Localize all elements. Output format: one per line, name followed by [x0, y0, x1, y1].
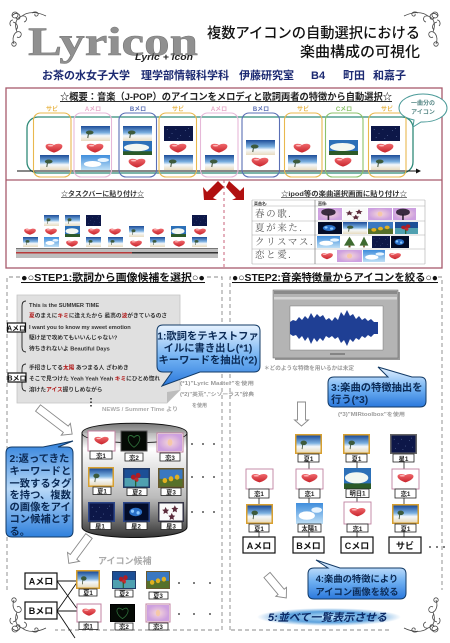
author line [42, 68, 406, 82]
melody to candidates matrix: Aメロ [29, 576, 53, 586]
section timeline: サビ [172, 105, 184, 113]
column: A melody: 夏1 [254, 525, 264, 533]
panel: step 2 [230, 271, 445, 630]
lyric source: NEWS / Summer Time より [102, 406, 178, 413]
candidate row: summer: 夏3 [166, 488, 176, 496]
callout 4: narrow icons [308, 560, 406, 599]
column: B melody: 恋1 [305, 489, 315, 498]
section timeline: サビ [297, 105, 309, 113]
title [207, 25, 421, 61]
candidate row: stars: 星2 [131, 522, 141, 530]
author line: B4 [311, 70, 326, 82]
section timeline: Aメロ [85, 106, 101, 113]
callout 3: feature extraction: 3:楽曲の特徴抽出を [331, 381, 423, 394]
lyrics sheet: 溶けたアイス握りしめながら [29, 386, 102, 394]
lyrics sheet: そこで見つけた Yeah Yeah Yeah キミにひとめ惚れ [29, 374, 160, 382]
arrow: red left [203, 181, 224, 200]
decorative corner ornament top right [404, 12, 440, 46]
column: sabi: 夏1 [401, 525, 411, 533]
column: sabi: 恋1 [401, 489, 411, 498]
melody to candidates matrix [25, 570, 211, 638]
callout 1: extract keywords: キーワードを抽出(*2) [159, 354, 257, 366]
MIRtoolbox note: (*3)"MIRtoolbox"を使用 [338, 411, 405, 418]
author line: 理学部情報科学科 [141, 68, 229, 82]
row A candidates: 夏2 [119, 590, 129, 598]
column: C melody: 夏1 [352, 455, 362, 463]
tool notes [180, 380, 254, 409]
melody to candidates matrix: Bメロ [29, 606, 53, 616]
step 5 banner: 5:並べて一覧表示させる [268, 611, 387, 624]
callout 2: candidate images: 一致するタグ [10, 477, 72, 490]
ipod song table [252, 200, 425, 264]
callout 2: candidate images [6, 441, 73, 538]
section timeline: サビ [381, 105, 393, 113]
decorative corner ornament bottom left [10, 598, 46, 632]
row B candidates: 恋2 [119, 622, 129, 631]
column: C melody [341, 434, 373, 553]
ipod song table: 夏が来た. [255, 222, 303, 234]
row A candidates: 夏3 [153, 592, 163, 600]
author line: 和嘉子 [373, 68, 406, 82]
callout 4: narrow icons: 4:楽曲の特徴により [316, 573, 398, 584]
arrow: lyrics to database [33, 402, 77, 440]
waveform window [273, 290, 400, 360]
arrow: database to candidates [63, 532, 95, 568]
ipod song table: 恋と愛. [255, 249, 292, 261]
row B candidates [77, 604, 170, 631]
undecided feature note: ＊どのような特徴を用いるかは未定 [264, 364, 354, 372]
column: B melody: 夏1 [304, 455, 314, 463]
candidate row: summer: 夏1 [97, 488, 107, 496]
section timeline: サビ [46, 105, 58, 113]
column: C melody: 明日1 [349, 490, 366, 498]
lyrics sheet: This is the SUMMER TIME [29, 303, 99, 309]
candidate row: love: 恋2 [129, 453, 139, 462]
section timeline: Bメロ [253, 106, 269, 113]
selected icons by section [243, 434, 445, 553]
lyrics sheet: I want you to know my sweet emotion [29, 325, 131, 331]
callout 2: candidate images: の画像をアイ [10, 500, 71, 514]
row B candidates: 恋3 [153, 622, 163, 631]
candidate row: stars: 星3 [166, 522, 176, 530]
candidate row: stars [88, 502, 184, 530]
candidate row: summer: 夏2 [132, 488, 142, 496]
callout 1: extract keywords: イルに書き出し(*1) [164, 342, 252, 354]
label: B melody: Bメロ [7, 374, 27, 382]
arrow: to final list [262, 571, 292, 602]
step 5 banner [257, 608, 401, 626]
section timeline: Bメロ [130, 106, 146, 113]
panel: overview [6, 88, 447, 268]
tool notes: を使用 [192, 402, 207, 409]
author line: 伊藤研究室 [239, 68, 294, 82]
logo: Lyricon: Lyricon [28, 19, 198, 64]
callout 2: candidate images: 2:返ってきた [10, 452, 69, 465]
ipod song table: 春の歌. [255, 208, 292, 220]
taskbar icons [16, 215, 218, 258]
row A candidates [76, 570, 170, 600]
ipod song table: 画像: [318, 200, 327, 206]
row B candidates: 恋1 [83, 622, 93, 630]
lyrics sheet: 手招きしてる太陽 あつまる人 ざわめき [29, 364, 129, 372]
column: sabi: 星1 [399, 455, 409, 463]
column: sabi [389, 434, 421, 553]
panel: step 1 [6, 271, 222, 638]
section timeline: Cメロ [336, 106, 352, 113]
arrow: red right [226, 181, 244, 200]
column: A melody: 恋1 [254, 489, 264, 498]
speech bubble: one song's icons [399, 94, 447, 127]
row A candidates: 夏1 [83, 589, 93, 597]
lyrics sheet: 待ちきれないよ Beautiful Days [29, 344, 110, 352]
callout 3: feature extraction: 行う(*3) [331, 393, 368, 406]
overview heading: ☆概要：音楽（J-POP）のアイコンをメロディと歌詞両者の特徴から自動選択☆ [60, 91, 392, 103]
logo: Lyricon: Lyric + icon [135, 52, 194, 62]
callout 2: candidate images: コン候補とす [10, 512, 71, 526]
lyrics sheet [17, 295, 180, 408]
speech bubble: one song's icons: 一曲分の [411, 99, 435, 107]
candidate row: stars: 星1 [95, 522, 105, 530]
candidate row: love: 恋3 [165, 453, 175, 462]
column: C melody: 恋1 [353, 524, 363, 533]
column: A melody: Aメロ [247, 541, 271, 551]
callout 2: candidate images: を持つ、複数 [10, 488, 72, 502]
ipod song table: クリスマス. [255, 237, 314, 248]
step 2 heading: ●○STEP2:音楽特徴量からアイコンを絞る○● [232, 271, 438, 284]
column: sabi: サビ [396, 540, 414, 551]
column: A melody [243, 469, 275, 553]
author line: 町田 [343, 69, 365, 82]
candidate row: love [88, 431, 183, 462]
candidate row: love: 恋1 [96, 451, 106, 460]
callout 2: candidate images: る。 [10, 526, 30, 538]
callout 2: candidate images: キーワードと [10, 466, 71, 478]
callout 4: narrow icons: アイコン画像を絞る [315, 586, 399, 597]
tool notes: (*1)"Lyric Master"を使用 [180, 380, 254, 387]
author line: お茶の水女子大学 [42, 68, 130, 82]
image database cylinder [82, 423, 187, 538]
lyrics sheet: 夏のまえにキミに逢えたから 最高の波がきているのさ [29, 312, 167, 320]
arrow: down to melody icons [294, 402, 308, 426]
candidate row: summer [88, 467, 184, 496]
callout 3: feature extraction [328, 367, 426, 407]
continuation dots [191, 443, 215, 513]
callout 1: extract keywords [157, 325, 260, 386]
taskbar heading: ☆タスクバーに貼り付け☆ [61, 189, 144, 198]
callout 1: extract keywords: 1:歌詞をテキストファ [157, 330, 259, 342]
section timeline [17, 105, 421, 177]
ipod song table: 楽曲名: [254, 200, 267, 206]
lyrics sheet: 駆け足で攻めてもいいんじゃない? [29, 334, 118, 342]
column: B melody: 太陽1 [301, 524, 318, 532]
column: B melody: Bメロ [296, 541, 321, 551]
column: B melody [293, 434, 324, 553]
decorative corner ornament top left [10, 12, 46, 46]
ipod heading: ☆ipod等の楽曲選択画面に貼り付け☆ [281, 189, 407, 198]
speech bubble: one song's icons: アイコン [411, 109, 435, 116]
step 1 heading: ●○STEP1:歌詞から画像候補を選択○● [21, 271, 205, 284]
icon candidates heading: アイコン候補 [98, 555, 152, 566]
title: 楽曲構成の可視化 [300, 43, 421, 61]
decorative corner ornament bottom right [404, 598, 440, 632]
label: A melody: Aメロ [7, 324, 26, 332]
column: C melody: Cメロ [345, 541, 369, 551]
tool notes: (*2)"英荒","シソーラス"辞典 [180, 391, 254, 398]
title: 複数アイコンの自動選択における [207, 25, 420, 42]
section timeline: Aメロ [211, 106, 227, 113]
